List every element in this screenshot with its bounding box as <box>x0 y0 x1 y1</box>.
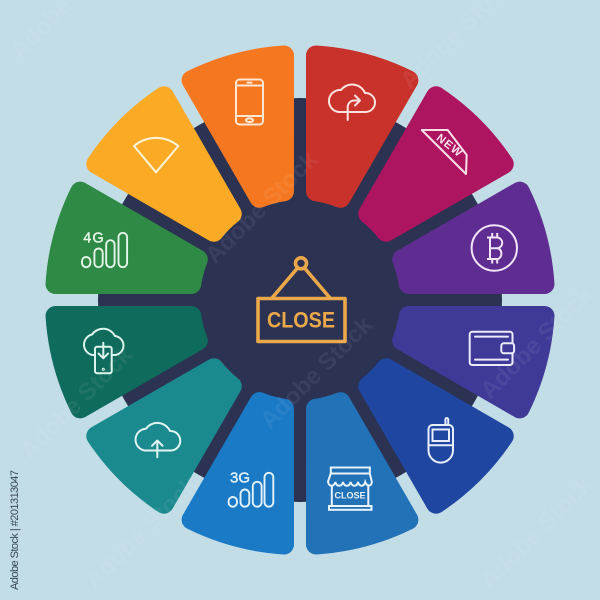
segment: indigo <box>402 316 544 408</box>
segment: bright blue <box>192 402 284 544</box>
watermark text: Adobe Stock <box>475 281 598 404</box>
icon: 4G signal: 4G <box>83 231 104 247</box>
icon: closed shop: CLOSE <box>334 491 366 501</box>
icon: cloud upload <box>136 423 180 457</box>
icon: wifi sector <box>134 138 178 172</box>
watermark text: Adobe Stock <box>80 471 203 594</box>
icon: smartphone <box>236 80 263 124</box>
icon: 4G signal <box>82 231 127 267</box>
segments ring <box>34 34 566 566</box>
icon: cloud to phone download <box>84 329 123 373</box>
icon: flip phone <box>428 418 453 463</box>
segment: teal <box>84 334 235 504</box>
watermark text: Adobe Stock <box>200 146 323 269</box>
icon: new tag <box>422 130 467 174</box>
icon: cloud with share arrow <box>329 84 375 120</box>
watermark text: Adobe Stock <box>255 311 378 434</box>
icon: bitcoin <box>472 225 517 271</box>
side credit text: Adobe Stock | #201313047 <box>9 470 21 590</box>
segment: green <box>56 192 198 284</box>
dark central disc <box>98 98 502 502</box>
segment: blue <box>257 397 408 566</box>
segment: orange <box>192 34 343 203</box>
segment: purple <box>397 192 566 343</box>
icon: new tag: NEW <box>434 132 464 160</box>
segment: magenta <box>365 96 516 266</box>
watermark text: Adobe Stock <box>475 471 598 594</box>
center icon: hanging close sign <box>258 258 345 342</box>
icon: closed shop <box>328 468 372 510</box>
icon: wallet <box>470 332 514 365</box>
icon: 3G signal: 3G <box>230 470 250 487</box>
segment: yellow <box>96 84 266 235</box>
segment: dark teal <box>34 257 203 408</box>
segment: red <box>316 56 408 198</box>
icon: 3G signal <box>229 470 273 507</box>
watermark text: Adobe Stock <box>15 341 138 464</box>
center label: CLOSE <box>267 307 335 332</box>
segment: navy <box>334 365 504 516</box>
